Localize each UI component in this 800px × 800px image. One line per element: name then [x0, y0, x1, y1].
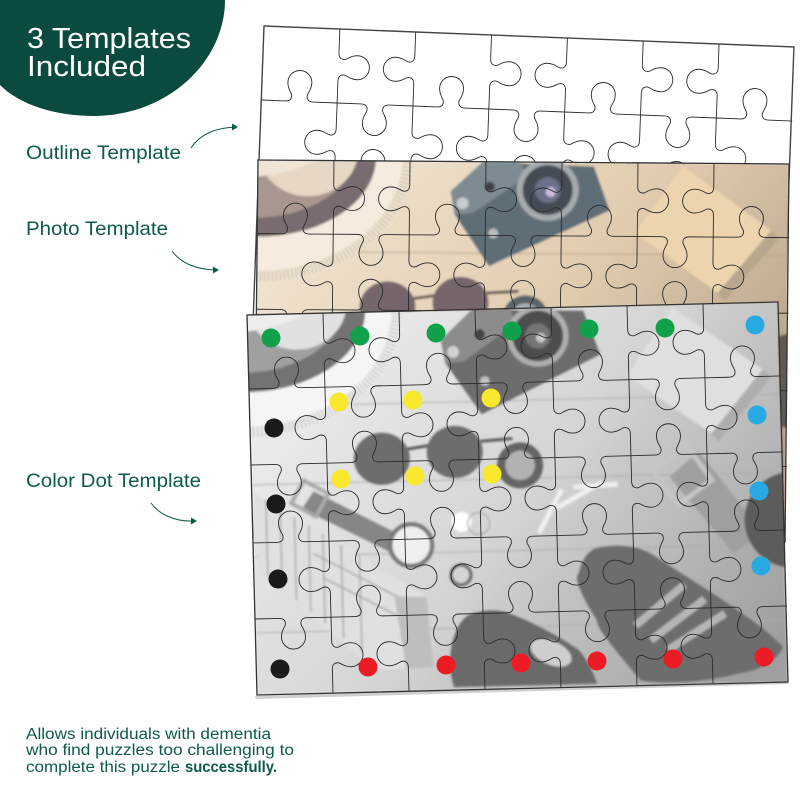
title badge	[0, 0, 225, 116]
arrow: outline template	[191, 124, 237, 148]
panel: photo template sheet	[254, 159, 790, 543]
panel: color dot template sheet	[246, 301, 789, 699]
puzzle outline over grayscale photo	[247, 302, 789, 695]
black dots	[264, 418, 290, 678]
title	[27, 23, 191, 83]
description text: who find puzzles too challenging to	[25, 742, 294, 759]
label: photo template: Photo Template	[26, 219, 168, 240]
puzzle outline over photo	[254, 160, 790, 542]
puzzle outline	[250, 26, 795, 427]
title: Included	[27, 51, 146, 83]
panel: outline template sheet	[250, 26, 795, 427]
blue dots	[746, 316, 770, 576]
arrow: color dot template	[151, 503, 196, 524]
label: outline template: Outline Template	[26, 143, 181, 164]
description text: successfully.	[185, 759, 277, 776]
photo: travel objects in grayscale	[248, 302, 788, 694]
photo: travel objects in colour	[257, 160, 788, 524]
yellow dots	[330, 388, 502, 488]
title: 3 Templates	[27, 23, 191, 55]
description text	[25, 726, 294, 776]
description text: complete this puzzle	[26, 759, 180, 776]
red dots	[358, 648, 774, 676]
green dots	[262, 318, 674, 348]
arrow: photo template	[172, 251, 218, 273]
label: color dot template: Color Dot Template	[26, 471, 201, 492]
description text: Allows individuals with dementia	[26, 726, 271, 743]
